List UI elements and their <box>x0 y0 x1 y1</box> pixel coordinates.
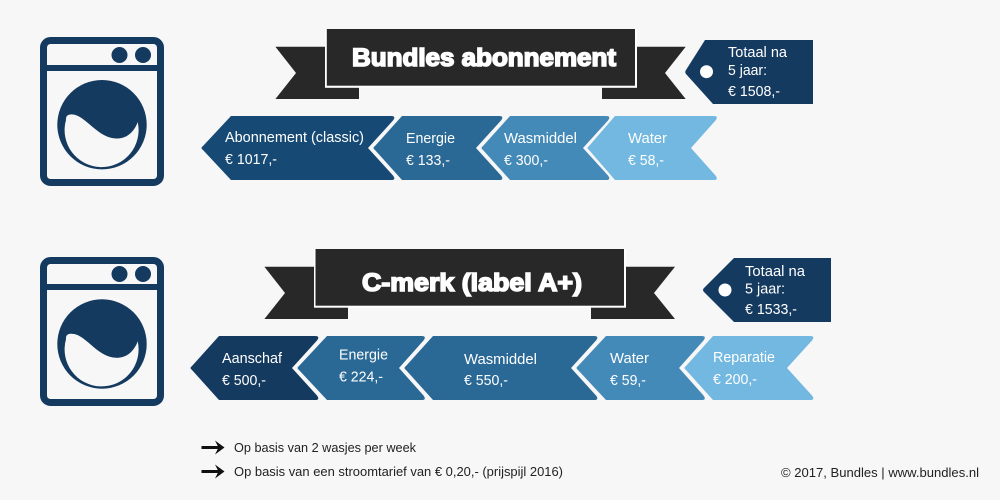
chevron: Wasmiddel: Wasmiddel <box>504 131 577 147</box>
chevron: Wasmiddel: € 550,- <box>464 373 508 389</box>
chevron: Wasmiddel: € 300,- <box>504 153 548 169</box>
chevron: Energie: Energie <box>339 348 388 364</box>
chevron: Wasmiddel: Wasmiddel <box>464 352 537 368</box>
chevron: Water <box>588 116 717 180</box>
chevron: Abonnement: Abonnement (classic) <box>225 130 364 146</box>
chevron: Water <box>576 336 705 400</box>
icon: washing machine bottom <box>43 260 161 402</box>
chevron: Reparatie <box>684 336 813 400</box>
chevron: Wasmiddel <box>404 336 597 400</box>
price tag: total Bundles: Totaal na <box>728 45 788 61</box>
heading: Bundles abonnement: Bundles abonnement <box>352 44 617 72</box>
chevron: Energie: € 133,- <box>406 153 450 169</box>
chevron: Water: Water <box>628 131 667 147</box>
chevron: Water: € 58,- <box>628 153 664 169</box>
ribbon: Bundles abonnement <box>275 28 686 99</box>
cost chevrons: C-merk <box>190 336 813 400</box>
price tag: total C-merk <box>703 258 831 322</box>
chevron: Water: Water <box>610 351 649 367</box>
chevron: Aanschaf: € 500,- <box>222 373 266 389</box>
chevron: Water: € 59,- <box>610 373 646 389</box>
chevron: Energie <box>374 116 502 180</box>
chevron: Reparatie: Reparatie <box>713 350 775 366</box>
chevron: Aanschaf: Aanschaf <box>222 351 283 367</box>
price tag: total C-merk: € 1533,- <box>745 302 797 318</box>
arrow <box>202 464 224 478</box>
price tag: total Bundles: € 1508,- <box>728 84 780 100</box>
ribbon: C-merk (label A+) <box>264 249 675 319</box>
chevron: Reparatie: € 200,- <box>713 372 757 388</box>
chevron: Energie: € 224,- <box>339 370 383 386</box>
price tag: total C-merk: Totaal na <box>745 264 806 280</box>
footnote: washes per week: Op basis van 2 wasjes per week <box>234 441 417 455</box>
cost chevrons: Bundles abonnement <box>202 116 717 180</box>
chevron: Aanschaf <box>190 336 318 400</box>
icon: washing machine top <box>43 40 161 182</box>
chevron: Energie <box>298 336 425 400</box>
chevron: Wasmiddel <box>482 116 609 180</box>
footnote: electricity tariff: Op basis van een stroomtarief van € 0,20,- (prijspijl 2016) <box>234 465 563 479</box>
chevron: Energie: Energie <box>406 131 455 147</box>
heading: C-merk (label A+): C-merk (label A+) <box>362 269 582 297</box>
price tag: total C-merk: 5 jaar: <box>745 282 785 298</box>
price tag: total Bundles <box>685 40 813 104</box>
copyright: © 2017, Bundles | www.bundles.nl <box>781 466 979 480</box>
arrow <box>202 440 224 454</box>
chevron: Abonnement: € 1017,- <box>225 152 277 168</box>
price tag: total Bundles: 5 jaar: <box>728 63 767 79</box>
chevron: Abonnement <box>202 116 394 180</box>
